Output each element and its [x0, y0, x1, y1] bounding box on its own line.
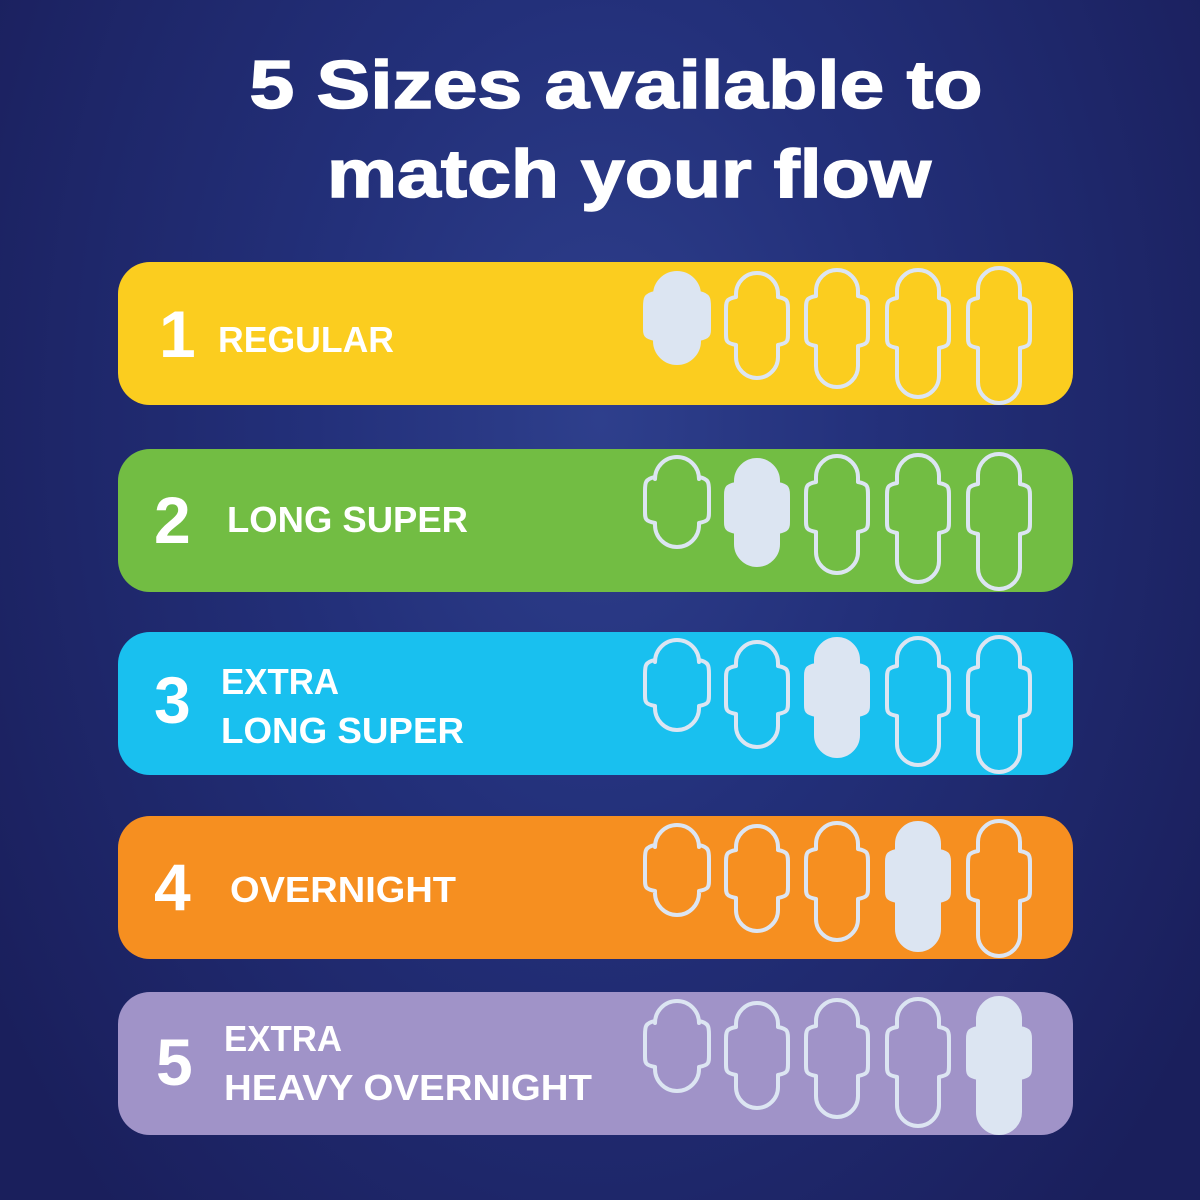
row 4: overnight: 4: [154, 850, 191, 924]
pads row 1: [645, 268, 1030, 403]
title: match your flow: [327, 136, 932, 212]
row 3: extra long super: 3: [154, 663, 191, 737]
row 5: extra heavy overnight: HEAVY OVERNIGHT: [224, 1067, 592, 1108]
row 3: extra long super: EXTRA: [221, 661, 339, 702]
row 3: extra long super: [118, 632, 1073, 775]
title: 5 Sizes available to: [250, 47, 982, 123]
row 5: extra heavy overnight: [118, 992, 1073, 1135]
pads row 5: [645, 998, 1030, 1133]
row 1: regular: REGULAR: [218, 319, 394, 360]
row 1: regular: [118, 262, 1073, 405]
pads row 4: [645, 821, 1030, 956]
title: [250, 47, 982, 212]
row 4: overnight: OVERNIGHT: [230, 869, 456, 910]
row 4: overnight: [118, 816, 1073, 959]
row 3: extra long super: LONG SUPER: [221, 710, 464, 751]
row 1: regular: 1: [159, 297, 196, 371]
row 2: long super: LONG SUPER: [227, 499, 468, 540]
pads row 3: [645, 637, 1030, 772]
pads row 2: [645, 454, 1030, 589]
row 5: extra heavy overnight: EXTRA: [224, 1018, 342, 1059]
row 5: extra heavy overnight: 5: [156, 1025, 193, 1099]
row 2: long super: [118, 449, 1073, 592]
row 2: long super: 2: [154, 483, 191, 557]
